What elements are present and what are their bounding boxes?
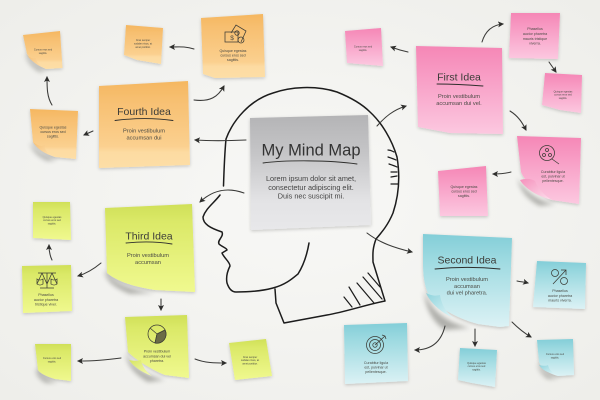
note: green bottom right: Cras semper — [243, 356, 257, 359]
note: pink bottom — [438, 166, 488, 216]
panel: first idea: First Idea — [437, 72, 481, 84]
note: orange money: $ — [230, 35, 234, 42]
note: pink small left — [345, 28, 383, 66]
note: pink right small: Quisque egestas — [554, 90, 573, 94]
note: pink small left: sagittis. — [359, 49, 368, 52]
note: blue bottom small — [458, 348, 497, 387]
note: orange small top left — [23, 31, 62, 72]
note: orange money: sagittis. — [227, 58, 239, 62]
note: blue bottom small: Quisque egestas — [467, 362, 487, 365]
panel: fourth idea: accumsan dui — [126, 136, 162, 142]
note: blue target: Curabitur ligula — [364, 361, 388, 365]
panel: first idea: accumsan dui vel. — [436, 101, 482, 107]
note: blue target — [344, 323, 408, 384]
note: orange small top: amet porttitor. — [135, 46, 151, 49]
note: orange small top — [124, 25, 163, 64]
note: green pie — [125, 315, 189, 382]
note: blue bottom small: sagittis. — [472, 368, 481, 372]
note: pink bottom: sagittis. — [458, 194, 470, 198]
note: pink right small — [542, 73, 582, 113]
note: pink bottom: Quisque egestas — [451, 185, 478, 189]
note: green pie: pharetra. — [150, 359, 164, 363]
note: pink magnifier: Curabitur ligula — [541, 170, 565, 174]
title: My Mind Map — [261, 142, 361, 160]
note: blue percent — [533, 261, 586, 309]
panel: center note — [250, 115, 371, 230]
note: orange money: Quisque egestas — [220, 49, 247, 53]
icon: percent — [552, 270, 568, 284]
note: blue right small: Cursus eros sed — [546, 353, 565, 356]
note: pink right small: sagittis. — [559, 97, 568, 100]
note: green pie: Proin vestibulum — [144, 350, 170, 354]
note: orange left: cursus eros sed — [40, 130, 66, 134]
panel: third idea: Proin vestibulum — [127, 253, 169, 259]
note: orange small top: Cras semper — [136, 39, 150, 42]
note: blue percent: auctor pharetra — [548, 294, 572, 298]
note: green top left — [33, 202, 71, 240]
note: pink top right — [509, 13, 560, 59]
panel: second idea: accumsan — [454, 284, 480, 290]
panel: fourth idea — [99, 81, 190, 168]
icon: pie chart — [148, 325, 166, 343]
panel: center note: Duis nec suscipit mi. — [278, 192, 344, 200]
note: green bottom right: amet porttitor. — [242, 362, 258, 366]
note: blue target: est, pulvinar ut — [364, 366, 388, 370]
note: pink magnifier — [517, 136, 581, 206]
icon: money — [225, 25, 246, 43]
note: blue percent: mauris viverra. — [548, 298, 572, 302]
icon: magnifier — [540, 146, 559, 164]
panel: fourth idea: Proin vestibulum — [123, 128, 165, 134]
note: orange left: sagittis. — [47, 134, 59, 138]
note: blue target: pellentesque. — [365, 370, 387, 374]
note: pink top right: auctor pharetra — [523, 32, 547, 36]
note: blue percent: Phasellus — [552, 289, 568, 293]
panel: center note: Lorem ipsum dolor sit amet, — [266, 174, 356, 183]
note: orange left: Quisque egestas — [40, 126, 67, 130]
note: green bottom left: sagittis. — [48, 360, 57, 364]
head outline drawing — [203, 88, 399, 323]
note: green scales: tristique viver. — [35, 302, 57, 306]
note: orange small top: sodales risus, at — [134, 42, 152, 46]
note: pink top right: viverra. — [529, 42, 541, 46]
note: pink top right: Phasellus — [527, 27, 543, 31]
note: orange money: cursus eros sed — [220, 54, 246, 58]
panel: second idea — [423, 234, 512, 330]
panel: fourth idea: Fourth Idea — [117, 106, 171, 118]
note: orange money — [201, 14, 265, 78]
note: green bottom left — [35, 344, 71, 383]
note: pink small left: Cursus eros sed — [354, 46, 373, 48]
note: green top left: Quisque egestas — [43, 216, 62, 219]
note: green top left: cursus eros sed — [43, 219, 61, 222]
panel: third idea: Third Idea — [125, 230, 173, 242]
note: orange small top left: sagittis. — [39, 52, 48, 55]
note: green scales: Phasellus — [38, 293, 54, 297]
note: blue right small: sagittis. — [551, 356, 560, 360]
arrows — [47, 24, 556, 363]
panel: first idea: Proin vestibulum — [438, 94, 480, 100]
note: orange left — [30, 109, 78, 161]
panel: second idea: dui vel pharetra. — [447, 290, 488, 296]
note: green pie: accumsan dui vel — [143, 354, 171, 358]
icon: target — [366, 335, 386, 354]
note: pink bottom: cursus eros sed — [451, 190, 477, 194]
panel: second idea: Second Idea — [438, 254, 497, 266]
panel: center note: consectetur adipiscing elit. — [268, 183, 354, 192]
note: orange small top left: Cursus eros sed — [34, 48, 53, 52]
note: pink magnifier: est, pulvinar ut — [541, 174, 565, 178]
note: green bottom right — [229, 339, 272, 380]
panel: second idea: Proin vestibulum — [446, 277, 488, 283]
note: pink top right: mauris tristique — [523, 37, 547, 41]
note: blue bottom small: cursus eros sed — [468, 365, 486, 368]
icon: scales — [37, 273, 57, 288]
note: pink right small: cursus eros sed — [554, 94, 572, 96]
note: green bottom left: Cursus eros sed — [43, 357, 62, 360]
note: green scales — [22, 265, 72, 313]
note: green top left: sagittis. — [48, 222, 57, 226]
note: blue right small — [537, 339, 574, 379]
panel: first idea — [416, 46, 503, 134]
panel: third idea: accumsan — [135, 260, 161, 266]
note: green bottom right: sodales risus, at — [241, 359, 259, 362]
note: pink magnifier: pellentesque. — [542, 179, 564, 183]
panel: third idea — [104, 204, 195, 294]
note: green scales: auctor pharetra — [34, 298, 58, 302]
